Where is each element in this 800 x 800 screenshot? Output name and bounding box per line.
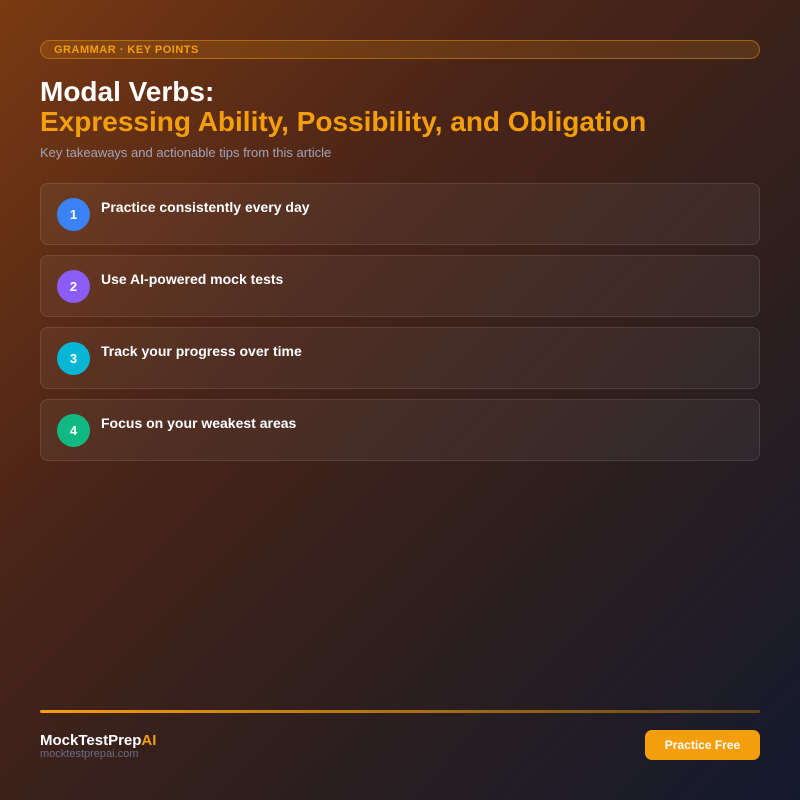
card 4: [40, 399, 760, 461]
card 1: [40, 183, 760, 245]
subtitle: Key takeaways and actionable tips from this article: [40, 145, 331, 160]
card 1: 1: [70, 207, 77, 222]
tag pill: [40, 40, 760, 59]
brand: MockTestPrepAI: [40, 732, 156, 749]
card 3: Track your progress over time: [101, 343, 302, 359]
title line 1: Modal Verbs:: [40, 76, 214, 107]
card 4: Focus on your weakest areas: [101, 415, 296, 431]
card 1: Practice consistently every day: [101, 199, 310, 215]
card 3: 3: [70, 351, 77, 366]
tag pill: GRAMMAR · KEY POINTS: [54, 44, 199, 56]
title line 2: Expressing Ability, Possibility, and Obligation: [40, 106, 646, 137]
card 2: [40, 255, 760, 317]
card 2: Use AI-powered mock tests: [101, 271, 283, 287]
button: [645, 730, 760, 760]
url: mocktestprepai.com: [40, 748, 138, 760]
button: Practice Free: [665, 738, 740, 752]
card 2: 2: [70, 279, 77, 294]
card 3: [40, 327, 760, 389]
card 4: 4: [70, 423, 77, 438]
